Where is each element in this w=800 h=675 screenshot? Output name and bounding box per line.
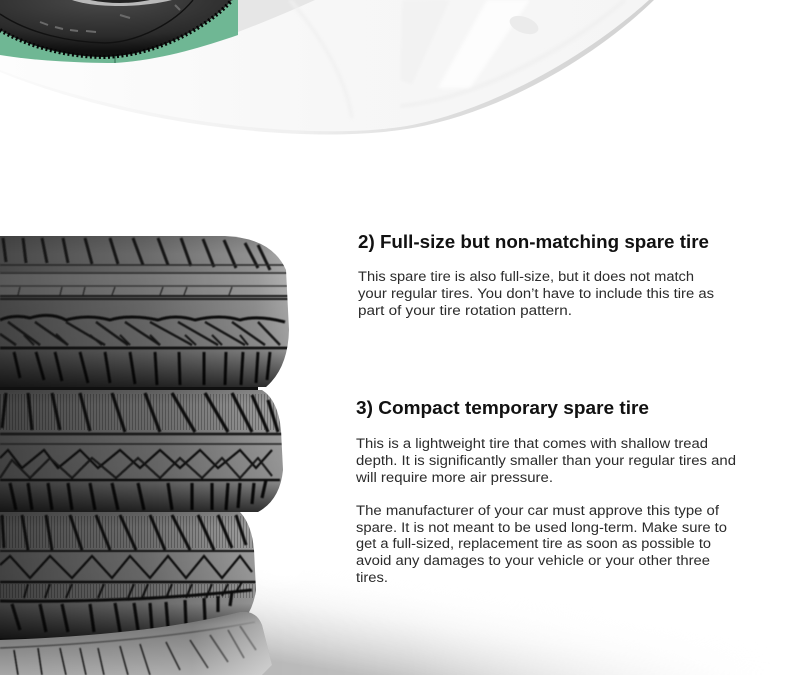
section 2 heading: 2) Full-size but non-matching spare tire bbox=[358, 231, 709, 252]
section 3 second paragraph bbox=[356, 503, 727, 586]
section 2 text block bbox=[358, 269, 714, 319]
tire 1 bbox=[0, 236, 290, 388]
stack of tires bbox=[0, 236, 302, 675]
wheel nut bbox=[507, 12, 541, 38]
spare tire on green backing bbox=[0, 0, 238, 63]
tire 3 bbox=[0, 512, 258, 639]
section 2 text block: This spare tire is also full-size, but it does not match bbox=[358, 269, 694, 285]
white glow behind tires bbox=[262, 240, 302, 580]
dark contact strips bbox=[0, 384, 258, 644]
section 2 text block: your regular tires. You don’t have to include this tire as bbox=[358, 286, 714, 302]
section 2 text block: part of your tire rotation pattern. bbox=[358, 303, 572, 319]
tire 4 bbox=[0, 608, 275, 675]
section 3 second paragraph: avoid any damages to your vehicle or your other three bbox=[356, 553, 710, 569]
section 3 second paragraph: The manufacturer of your car must approve this type of bbox=[356, 503, 719, 519]
section 3 heading: 3) Compact temporary spare tire bbox=[356, 397, 649, 418]
section 3 first paragraph: depth. It is significantly smaller than your regular tires and bbox=[356, 453, 736, 469]
section 3 first paragraph: This is a lightweight tire that comes with shallow tread bbox=[356, 436, 708, 452]
section 3 first paragraph: will require more air pressure. bbox=[355, 470, 553, 486]
tire 2 bbox=[0, 390, 285, 513]
section 3 first paragraph bbox=[355, 436, 736, 486]
section 3 second paragraph: tires. bbox=[356, 570, 388, 586]
floor shadow bbox=[249, 593, 638, 675]
section 3 second paragraph: spare. It is not meant to be used long-term. Make sure to bbox=[356, 520, 727, 536]
section 3 second paragraph: get a full-sized, replacement tire as soon as possible to bbox=[356, 536, 711, 552]
wheel backdrop graphic bbox=[0, 0, 654, 134]
